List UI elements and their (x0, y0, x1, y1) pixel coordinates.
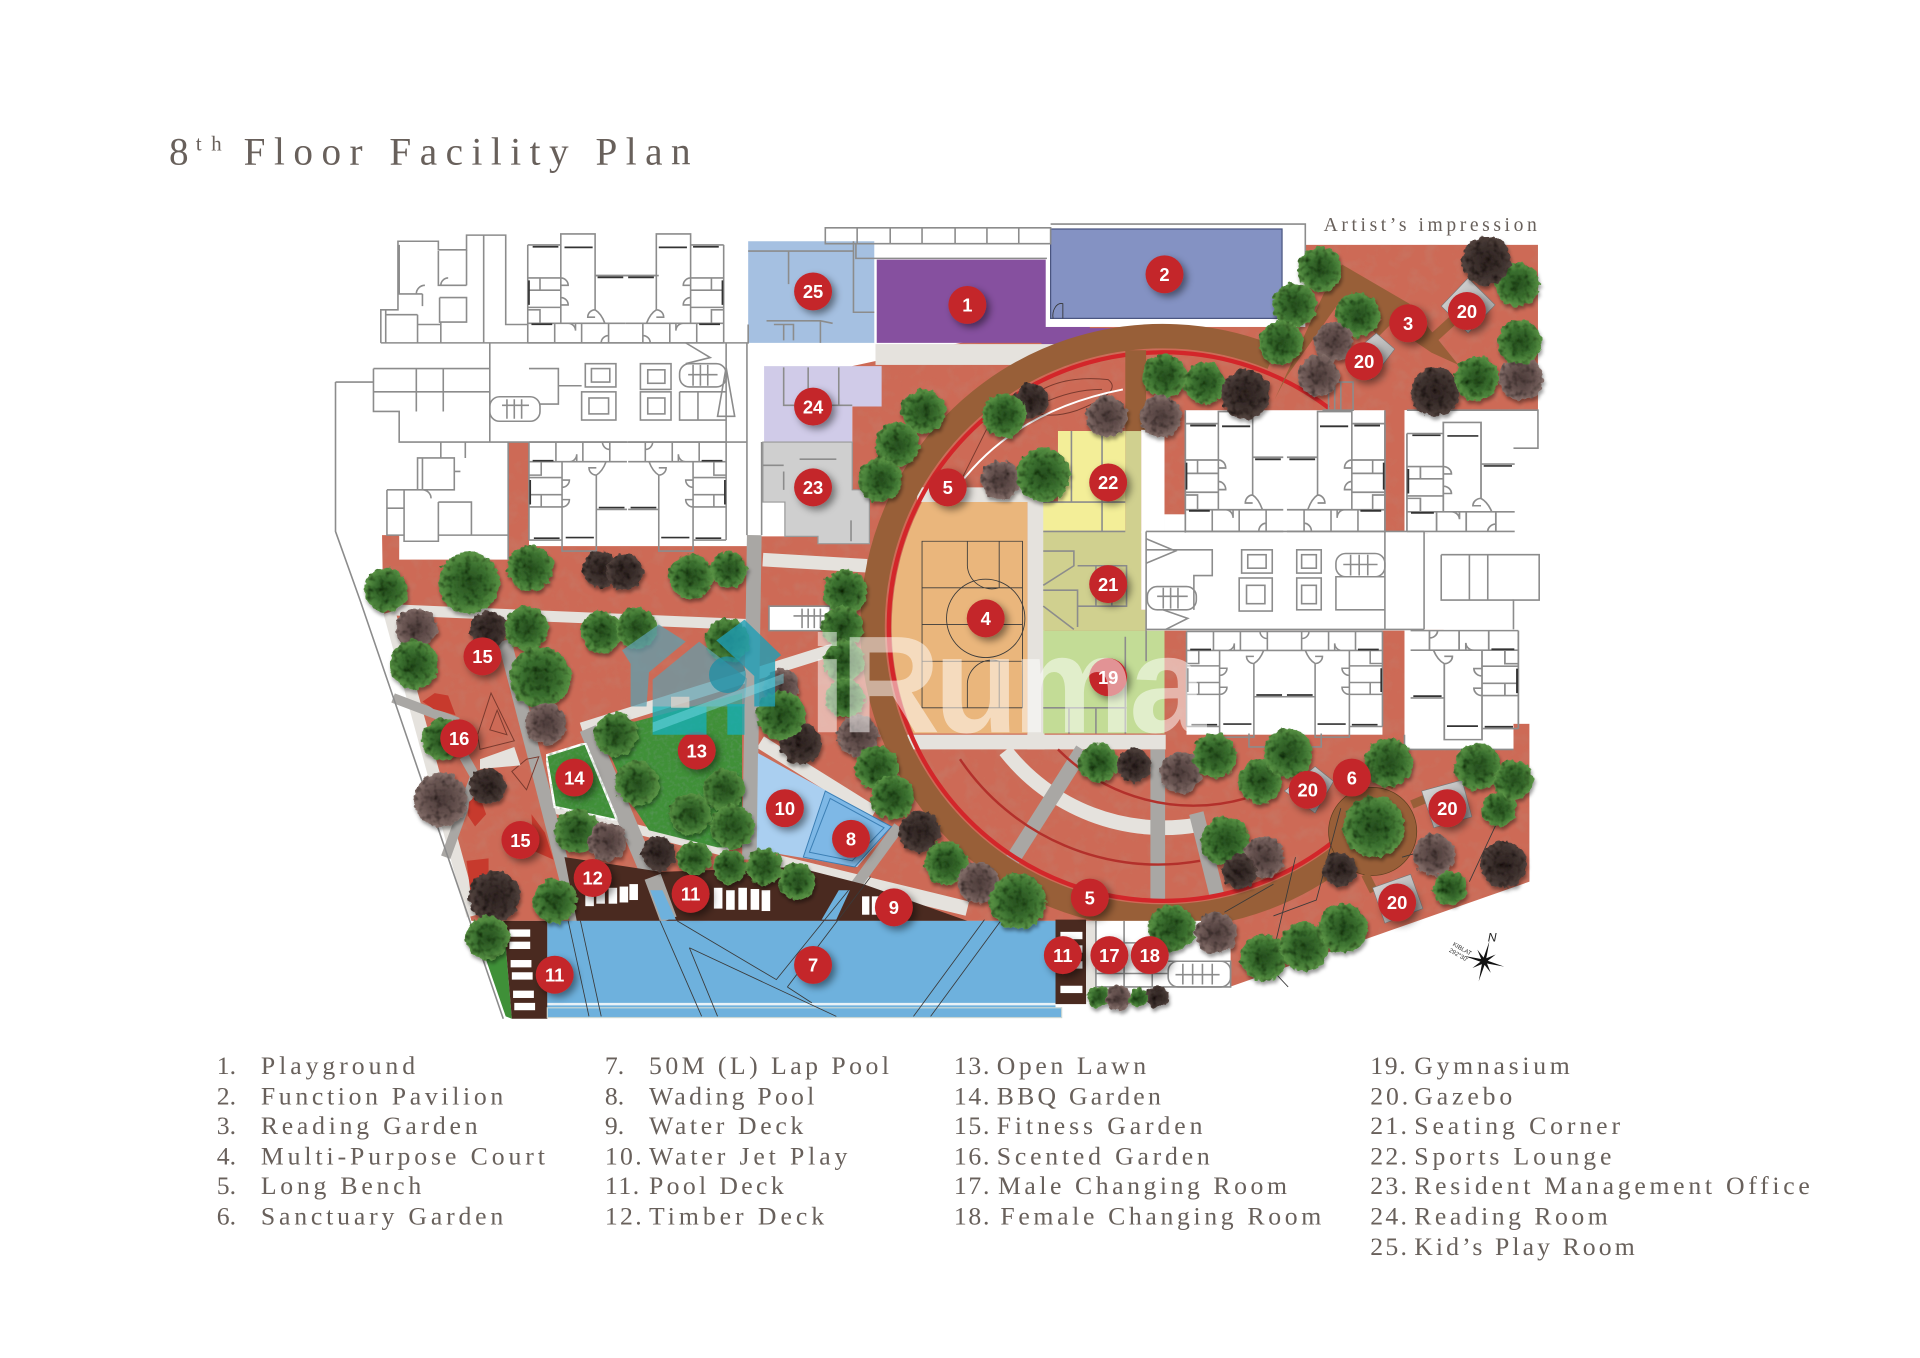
panel: resident management office (763, 442, 869, 544)
badge: 15 Fitness Garden south: 15 (510, 830, 531, 851)
badge: 19 Gymnasium (1089, 658, 1127, 696)
legend column 1 (217, 1051, 545, 1231)
badge: 23 Resident Management Office: 23 (803, 477, 823, 498)
legend column 3: Scented Garden (997, 1142, 1210, 1171)
legend column 4: Kid’s Play Room (1414, 1232, 1635, 1261)
legend column 2: Pool Deck (649, 1171, 784, 1200)
legend column 2: 7. (605, 1051, 624, 1080)
legend column 3: Open Lawn (997, 1051, 1146, 1080)
panel: multi-purpose court (892, 502, 1027, 733)
badge: 11 Pool Deck east (1044, 936, 1082, 974)
inner ring brick disc (883, 347, 1444, 907)
timber decks (503, 857, 1086, 1019)
badge: 5 Long Bench north (929, 468, 967, 506)
badge: 24 Reading Room (794, 388, 832, 426)
compass: KIBLAT (1451, 941, 1473, 957)
legend column 3: 18. (954, 1202, 989, 1231)
legend column 4: Resident Management Office (1414, 1171, 1810, 1200)
legend column 4: Reading Room (1414, 1202, 1608, 1231)
badge: 3 Reading Garden: 3 (1403, 313, 1413, 334)
legend column 3: BBQ Garden (997, 1082, 1161, 1111)
badge: 21 Seating Corner (1089, 565, 1127, 603)
badge: 11 Pool Deck centre: 11 (681, 884, 700, 905)
badge: 9 Water Deck: 9 (889, 897, 899, 918)
legend column 2: Timber Deck (649, 1202, 824, 1231)
badge: 11 Pool Deck centre (672, 875, 710, 913)
lawn: open lawn and BBQ garden (485, 693, 742, 1019)
legend column 3: Female Changing Room (1000, 1202, 1321, 1231)
badge: 17 Male Changing Room: 17 (1099, 945, 1120, 966)
legend column 2: 12. (605, 1202, 642, 1231)
badge: 11 Pool Deck east: 11 (1053, 945, 1073, 966)
legend column 1: 4. (217, 1142, 236, 1171)
badge: 20 Gazebo north: 20 (1354, 351, 1374, 372)
legend column 1: 1. (217, 1051, 236, 1080)
badge: 20 Gazebo centre: 20 (1298, 780, 1318, 801)
badge: 5 Long Bench south (1071, 879, 1109, 917)
legend column 4: 19. (1370, 1051, 1406, 1080)
legend column 1: 3. (217, 1111, 236, 1140)
badge: 14 BBQ Garden: 14 (564, 767, 585, 788)
badge: 10 Water Jet Play (766, 789, 804, 827)
badge: 12 Timber Deck: 12 (582, 868, 603, 889)
legend column 4: 21. (1370, 1111, 1407, 1140)
building: white footprints (769, 410, 1538, 1002)
badge: 21 Seating Corner: 21 (1098, 574, 1118, 595)
watermark: iRuma house logo (622, 608, 1207, 762)
legend column 2: 8. (605, 1082, 624, 1111)
legend column 2: 50M (L) Lap Pool (649, 1051, 889, 1080)
title: th (196, 132, 222, 156)
badge: 20 Gazebo north-east (1448, 292, 1486, 330)
badge: 20 Gazebo south (1378, 883, 1416, 921)
badge: 24 Reading Room: 24 (803, 396, 824, 417)
building: left tower floor plan (336, 224, 1305, 1019)
badge: 2 Function Pavilion: 2 (1159, 264, 1170, 285)
badge: 22 Sports Lounge (1089, 463, 1127, 501)
badge: 6 Sanctuary Garden (1333, 759, 1371, 797)
legend column 3: Male Changing Room (998, 1171, 1287, 1200)
badge: 17 Male Changing Room (1090, 936, 1128, 974)
badge: 19 Gymnasium: 19 (1098, 667, 1118, 688)
legend column 3: 15. (954, 1111, 989, 1140)
legend column 1: Multi-Purpose Court (261, 1142, 545, 1171)
badge: 14 BBQ Garden (555, 759, 593, 797)
badge: 18 Female Changing Room (1131, 936, 1169, 974)
path network: stone bands (389, 487, 1198, 916)
badge: 20 Gazebo north-east: 20 (1457, 301, 1477, 322)
title: Floor Facility Plan (244, 131, 691, 174)
changing rooms and stair (1096, 921, 1231, 987)
badge: 20 Gazebo east: 20 (1437, 798, 1458, 819)
lounge chairs (509, 884, 1082, 1010)
badge: 2 Function Pavilion (1146, 255, 1183, 293)
legend column 4: Gymnasium (1414, 1051, 1570, 1080)
badge: 6 Sanctuary Garden: 6 (1347, 767, 1357, 788)
legend column 2: 11. (605, 1171, 639, 1200)
panel: 50M lap pool (547, 877, 1062, 1018)
legend column 4: Gazebo (1414, 1082, 1512, 1111)
badge: 15 Fitness Garden north (463, 637, 501, 675)
legend column 2: Wading Pool (649, 1082, 814, 1111)
badge: 8 Wading Pool: 8 (846, 829, 856, 850)
watermark: iRuma house logo: iRuma (808, 608, 1207, 762)
badge: 13 Open Lawn: 13 (687, 740, 707, 761)
legend column 3: 13. (954, 1051, 989, 1080)
landscape details: contours and hex planters (422, 379, 1123, 890)
badge: 18 Female Changing Room: 18 (1140, 945, 1160, 966)
legend column 2 (605, 1051, 889, 1231)
water: water jet play and wading pool (757, 753, 891, 867)
legend column 3: Fitness Garden (997, 1111, 1203, 1140)
legend column 4: Seating Corner (1414, 1111, 1620, 1140)
badge: 16 Scented Garden (440, 719, 478, 757)
badge: 4 Multi-Purpose Court (967, 599, 1005, 637)
badge: 22 Sports Lounge: 22 (1098, 472, 1118, 493)
path network: grey paving (393, 535, 1245, 921)
badge: 23 Resident Management Office (794, 468, 832, 506)
caption: artist's impression: Artist’s impression (1324, 215, 1537, 236)
building: right tower floor plan (1146, 382, 1539, 749)
badge: 25 Kid's Play Room: 25 (803, 281, 823, 302)
panel: sports lounge, seating corner, gymnasium (1043, 430, 1164, 733)
legend column 2: Water Jet Play (649, 1142, 847, 1171)
legend column 3 (954, 1051, 1321, 1231)
badge: 7 Lap Pool: 7 (808, 955, 818, 976)
badge: 13 Open Lawn (678, 732, 716, 770)
compass: N (1488, 931, 1497, 945)
badge: 1 Playground: 1 (962, 295, 972, 316)
legend column 3: 17. (954, 1171, 989, 1200)
legend column 4: 20. (1370, 1082, 1408, 1111)
legend column 4: 23. (1370, 1171, 1407, 1200)
legend column 1: 2. (217, 1082, 236, 1111)
badge: 5 Long Bench south: 5 (1085, 887, 1095, 908)
ground: brick landscape (382, 245, 1538, 987)
panel: playground purple area (876, 223, 1305, 365)
legend column 1: 6. (217, 1202, 236, 1231)
badge: 20 Gazebo east (1428, 789, 1466, 827)
legend column 1: Reading Garden (261, 1111, 478, 1140)
compass (1448, 931, 1504, 981)
badge: 12 Timber Deck (574, 859, 612, 897)
badge: 15 Fitness Garden north: 15 (472, 646, 493, 667)
legend column 1: 5. (217, 1171, 236, 1200)
badge: 7 Lap Pool (794, 946, 832, 984)
legend column 1: Function Pavilion (261, 1082, 503, 1111)
badge: 20 Gazebo centre (1289, 771, 1327, 809)
badge: 25 Kid's Play Room (794, 272, 832, 310)
gazebo platforms (1284, 278, 1495, 923)
compass: 292°30' (1448, 947, 1469, 963)
legend column 4 (1370, 1051, 1810, 1261)
trees (364, 236, 1543, 1010)
legend column 2: Water Deck (649, 1111, 803, 1140)
legend column 4: 24. (1370, 1202, 1407, 1231)
badge: 16 Scented Garden: 16 (449, 728, 469, 749)
badge: 5 Long Bench north: 5 (943, 477, 953, 498)
legend column 2: 9. (605, 1111, 624, 1140)
legend column 3: 16. (954, 1142, 989, 1171)
legend column 4: Sports Lounge (1414, 1142, 1611, 1171)
legend column 1: Long Bench (261, 1171, 421, 1200)
badge: 15 Fitness Garden south (501, 821, 539, 859)
legend column 1: Playground (261, 1051, 415, 1080)
legend column 4: 22. (1370, 1142, 1407, 1171)
legend column 3: 14. (954, 1082, 989, 1111)
legend column 1: Sanctuary Garden (261, 1202, 503, 1231)
legend column 4: 25. (1370, 1232, 1407, 1261)
badge: 1 Playground (948, 286, 986, 324)
badge: 11 Pool Deck west: 11 (545, 964, 564, 985)
title: 8 (169, 131, 189, 174)
panel: reading room (764, 366, 882, 442)
badge: 8 Wading Pool (832, 820, 870, 858)
badge: 3 Reading Garden (1389, 304, 1427, 342)
badge: 10 Water Jet Play: 10 (775, 798, 795, 819)
badge: 11 Pool Deck west (536, 956, 574, 994)
badge: 20 Gazebo north (1345, 342, 1383, 380)
panel: kid's play room (748, 241, 874, 343)
badge: 4 Multi-Purpose Court: 4 (981, 608, 992, 629)
badge: 20 Gazebo south: 20 (1387, 892, 1407, 913)
badge: 9 Water Deck (875, 888, 913, 926)
brown garden ring path (873, 265, 1504, 987)
legend column 2: 10. (605, 1142, 642, 1171)
